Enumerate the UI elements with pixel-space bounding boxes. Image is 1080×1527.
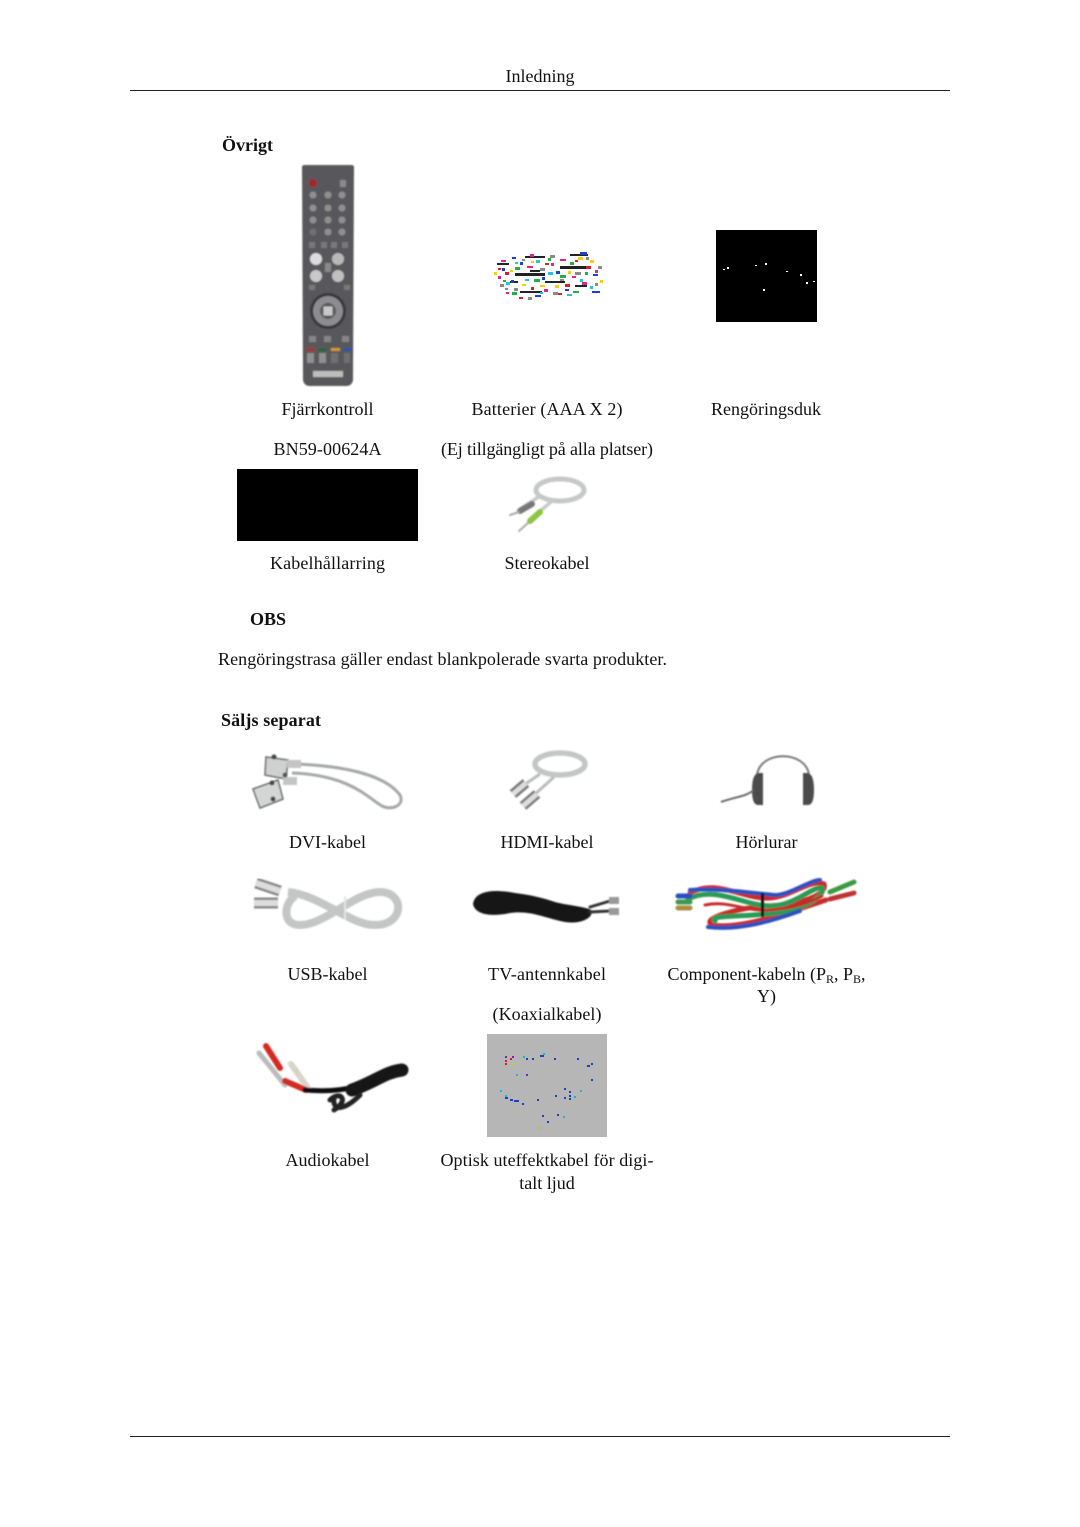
label: Hörlurar: Hörlurar	[736, 832, 797, 852]
icon: audio cable	[259, 1046, 402, 1110]
label: Component-kabeln: Y)	[757, 986, 776, 1007]
label: USB-kabel: USB-kabel	[288, 964, 368, 984]
label: Component-kabeln: B	[853, 972, 861, 986]
footer rule	[130, 1436, 950, 1437]
note text: Rengöringstrasa gäller endast blankpolerade svarta produkter.	[218, 649, 667, 669]
label: Kabelhållarring: Kabelhållarring	[270, 553, 385, 573]
label: Component-kabeln: , P	[834, 964, 853, 984]
heading: OBS: OBS	[250, 609, 286, 629]
label: Koaxialkabel: (Koaxialkabel)	[492, 1004, 602, 1025]
label: Rengöringsduk: Rengöringsduk	[711, 399, 821, 419]
label: availability note: (Ej tillgängligt på alla platser)	[441, 439, 653, 460]
label: Stereokabel: Stereokabel	[505, 553, 589, 573]
icon: USB cable	[254, 883, 398, 925]
label: Fjärrkontroll: Fjärrkontroll	[282, 399, 374, 419]
icon: headphones	[721, 756, 814, 805]
icon: TV antenna cable	[473, 891, 619, 923]
label: optical cable: Optisk uteffektkabel för digi-	[440, 1150, 654, 1170]
label: optical cable	[440, 1150, 654, 1193]
label: Component-kabeln	[667, 964, 866, 1007]
heading: Säljs separat: Säljs separat	[221, 710, 321, 730]
icon: optical cable (grey speckled image)	[487, 1034, 607, 1137]
label: DVI-kabel: DVI-kabel	[289, 832, 366, 852]
label: Component-kabeln: R	[826, 972, 834, 986]
label: HDMI-kabel: HDMI-kabel	[501, 832, 593, 852]
icon: HDMI cable	[513, 753, 585, 806]
label: Audiokabel: Audiokabel	[286, 1150, 369, 1170]
label: BN59-00624A: BN59-00624A	[274, 439, 382, 459]
label: Component-kabeln: ,	[861, 964, 866, 984]
label: TV-antennkabel: TV-antennkabel	[488, 964, 606, 984]
icon: cleaning cloth (black image with specks)	[716, 230, 817, 322]
label: Batterier: Batterier (AAA X 2)	[472, 399, 622, 420]
heading: Övrigt: Övrigt	[222, 135, 273, 155]
icon: cable holder ring (black image)	[237, 469, 418, 541]
page header: Inledning: Inledning	[506, 66, 574, 86]
label: optical cable: talt ljud	[519, 1173, 575, 1193]
label: Component-kabeln: Component-kabeln (P	[667, 964, 826, 984]
icon: stereo cable	[510, 479, 584, 531]
icon: component cable	[678, 880, 854, 928]
icon: batteries (corrupted speckle image)	[494, 252, 603, 300]
icon: remote control	[302, 165, 354, 386]
icon: DVI cable	[253, 754, 401, 808]
